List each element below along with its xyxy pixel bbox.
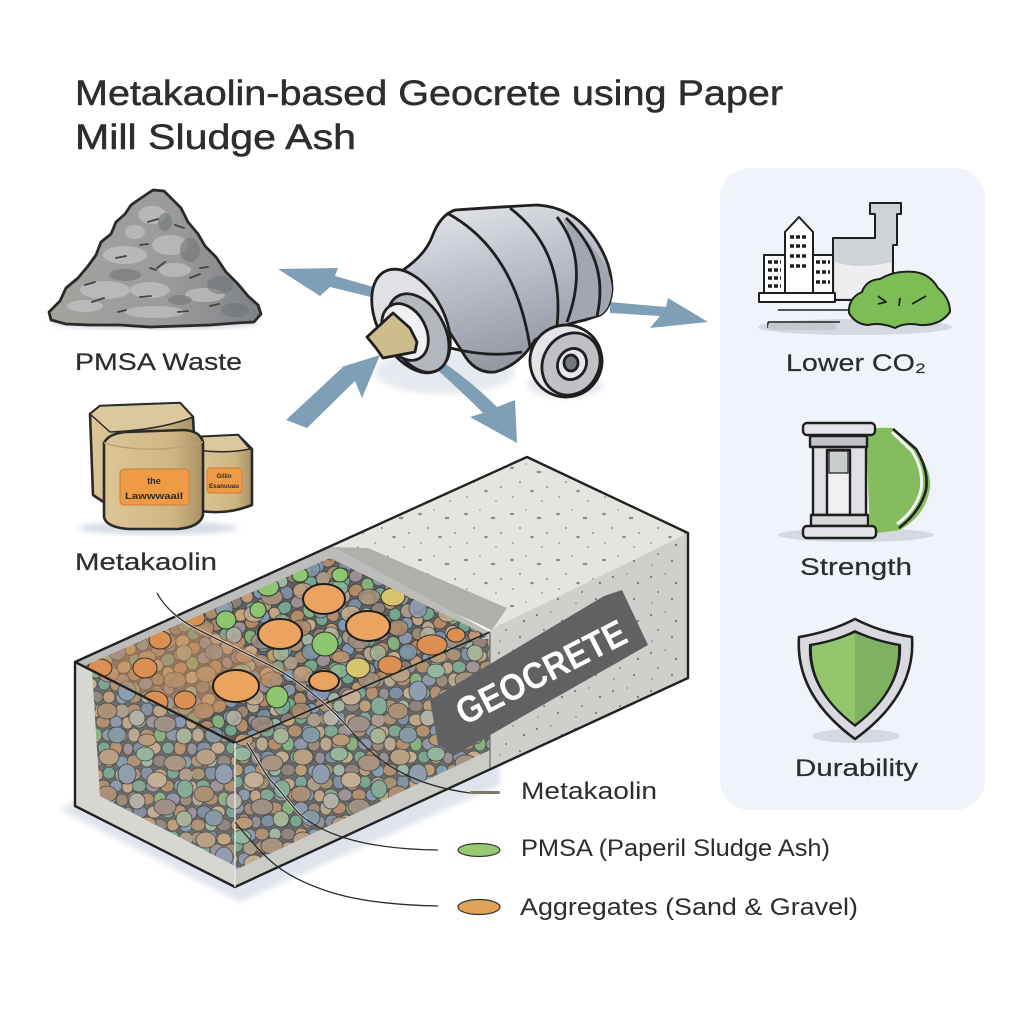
glass shell top	[75, 545, 490, 743]
label: Metakaolin: Metakaolin	[75, 549, 217, 576]
concrete right end	[490, 533, 688, 770]
icon: durability shield	[799, 619, 912, 743]
label: Lower CO2: Lower CO₂	[786, 350, 926, 377]
legend: aggregates: Aggregates (Sand & Gravel)	[520, 894, 858, 921]
title	[75, 74, 783, 157]
mixer ground shadow	[375, 350, 603, 398]
label: Strength: Strength	[800, 554, 912, 581]
glass shell right	[235, 632, 490, 887]
icon: concrete mixer	[356, 205, 615, 410]
label: Durability: Durability	[795, 755, 918, 782]
title: Metakaolin-based Geocrete using Paper	[75, 74, 783, 113]
cut recess shadow	[333, 547, 507, 630]
icon: lower CO2 city and bush	[758, 203, 952, 335]
icon: PMSA waste pile	[49, 190, 261, 329]
GEOCRETE label: GEOCRETE	[449, 612, 633, 733]
stones on right face	[235, 630, 495, 880]
block outline	[75, 457, 688, 887]
leader line: aggregates	[235, 822, 438, 906]
panel: benefits	[720, 168, 985, 810]
icon: strength pillar with shield	[778, 423, 934, 542]
arrow: from metakaolin to mixer	[286, 355, 380, 428]
block shadow	[60, 762, 500, 902]
icon: metakaolin drums: Lawwwaail	[125, 491, 183, 501]
icon: metakaolin drums: Gillin	[216, 474, 232, 480]
leader line: PMSA	[247, 743, 438, 850]
legend: PMSA: PMSA (Paperil Sludge Ash)	[521, 835, 830, 862]
large aggregates	[213, 584, 390, 702]
icon: metakaolin drums	[78, 403, 252, 535]
icon: metakaolin drums: Esanuuau	[209, 484, 239, 490]
arrow: mixer to geocrete	[428, 355, 517, 443]
geocrete block	[60, 457, 688, 902]
arrow: to PMSA waste	[278, 268, 377, 298]
icon: metakaolin drums: the	[147, 476, 161, 486]
stones on front face	[92, 672, 234, 866]
concrete top surface	[330, 457, 688, 630]
glass shell front	[75, 662, 235, 887]
arrow: mixer to benefits	[610, 298, 708, 328]
legend: metakaolin	[470, 778, 657, 805]
legend: metakaolin: Metakaolin	[521, 778, 657, 805]
leader line: metakaolin	[157, 593, 470, 793]
title: Mill Sludge Ash	[75, 118, 356, 157]
stones on top face	[85, 558, 488, 742]
label: PMSA Waste: PMSA Waste	[75, 349, 242, 376]
